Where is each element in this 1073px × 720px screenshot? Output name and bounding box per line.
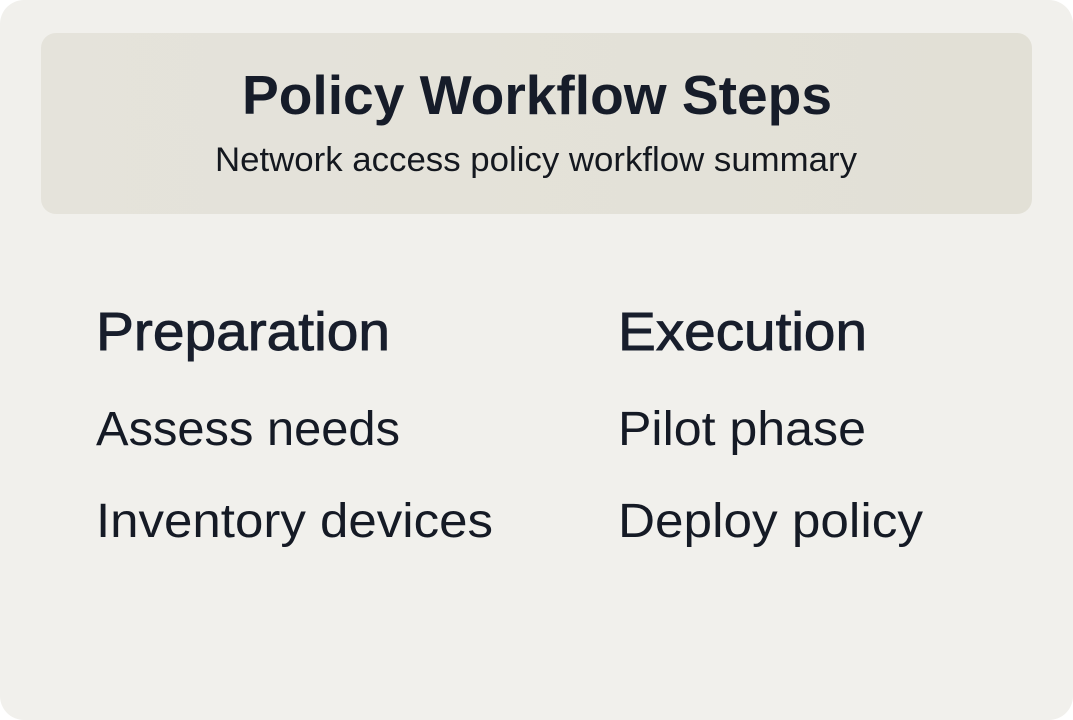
item: Deploy policy: Deploy policy <box>618 495 923 548</box>
title: Policy Workflow Steps <box>242 64 832 126</box>
column: Execution <box>618 302 923 548</box>
subtitle: Network access policy workflow summary <box>215 141 857 179</box>
column: Preparation <box>96 302 493 548</box>
heading: Preparation: Preparation <box>96 302 390 362</box>
header panel <box>41 33 1032 214</box>
item: Assess needs: Assess needs <box>96 403 400 456</box>
heading: Execution: Execution <box>618 302 867 362</box>
item: Pilot phase: Pilot phase <box>618 403 866 456</box>
item: Inventory devices: Inventory devices <box>96 495 493 548</box>
